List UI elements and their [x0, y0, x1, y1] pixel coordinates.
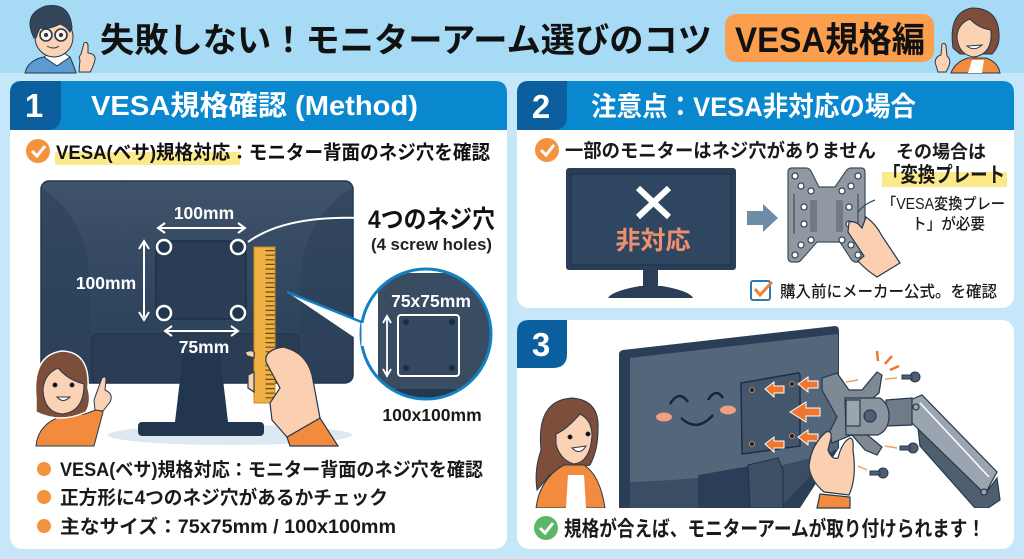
callout: 4 screw holes — [248, 206, 495, 254]
smiley face — [656, 393, 736, 425]
inset: zoomed hole sizes — [287, 269, 498, 399]
bullet list — [37, 459, 483, 538]
check line: 一部のモニターはネジ穴がありません — [565, 139, 876, 162]
icon: hand holding plate — [848, 217, 900, 277]
arrow — [747, 204, 778, 232]
panel 3: mounting — [517, 320, 1014, 549]
panel 1: VESA check method — [10, 81, 507, 549]
panel 1 heading bar: 1 — [25, 87, 43, 124]
illustration: monitor back — [41, 181, 353, 445]
illustration: woman — [536, 398, 605, 508]
dimension: bottom 75mm — [165, 326, 238, 357]
illustration: monitor with smiley — [619, 326, 839, 508]
VESA plate — [741, 373, 800, 454]
icon: hand holding ruler — [245, 347, 338, 446]
label: 100x100mm: 100x100mm — [382, 405, 482, 425]
title: 失敗しない！モニターアーム選びのコツ — [100, 22, 712, 60]
bullet list: 正方形に4つのネジ穴があるかチェック — [60, 486, 388, 509]
screws and sparkle lines — [846, 351, 920, 478]
panel 2 heading bar — [517, 81, 1014, 130]
panel 1 heading bar: VESA規格確認 (Method) — [91, 90, 418, 121]
illustration: monitor arm — [822, 372, 1000, 508]
panel 1 heading bar — [10, 81, 507, 130]
illustration: adapter plate — [788, 168, 865, 262]
icon: woman pointing — [36, 351, 111, 446]
VESA square and screw holes — [156, 240, 246, 320]
number badge 3 — [517, 320, 567, 368]
header band — [0, 0, 1024, 73]
note: その場合は変換プレート: ト」が必要 — [912, 214, 985, 233]
dimension: top 100mm — [158, 203, 245, 233]
icon: woman pointing — [935, 8, 1000, 73]
dimension: side 100mm: 100mm — [76, 273, 136, 293]
note: その場合は変換プレート: その場合は — [896, 142, 986, 162]
dimension: bottom 75mm: 75mm — [179, 337, 229, 357]
check line with highlight: VESA(ベサ)規格対応：モニター背面のネジ穴を確認 — [56, 142, 490, 164]
icon: ruler — [254, 247, 275, 403]
bullet list: 主なサイズ：75x75mm / 100x100mm — [60, 515, 396, 538]
panel 2 heading bar: 注意点：VESA非対応の場合 — [591, 92, 916, 122]
icon: hand holding mount — [809, 432, 854, 508]
illustration: monitor not supported: 非対応 — [615, 227, 691, 255]
icon: man pointing — [25, 5, 95, 73]
bullet list: VESA(ベサ)規格対応：モニター背面のネジ穴を確認 — [60, 459, 483, 481]
panel 2: VESA non-compatible — [517, 81, 1014, 308]
callout: 4 screw holes: 4つのネジ穴 — [368, 206, 495, 234]
note: その場合は変換プレート — [858, 142, 1007, 233]
illustration: monitor not supported — [566, 168, 736, 298]
checkbox note: 購入前にメーカー公式。を確認 — [780, 283, 997, 301]
number badge 3: 3 — [532, 326, 550, 363]
note: その場合は変換プレート: 「VESA変換プレー — [882, 195, 1005, 213]
orange arrows — [765, 377, 820, 452]
callout: 4 screw holes: (4 screw holes) — [371, 235, 492, 254]
panel 2 heading bar: 2 — [532, 88, 550, 125]
dimension: side 100mm — [76, 241, 149, 320]
dimension: top 100mm: 100mm — [174, 203, 234, 223]
badge: VESA規格編: VESA規格編 — [735, 21, 925, 60]
inset: zoomed hole sizes: 75x75mm — [391, 291, 471, 311]
